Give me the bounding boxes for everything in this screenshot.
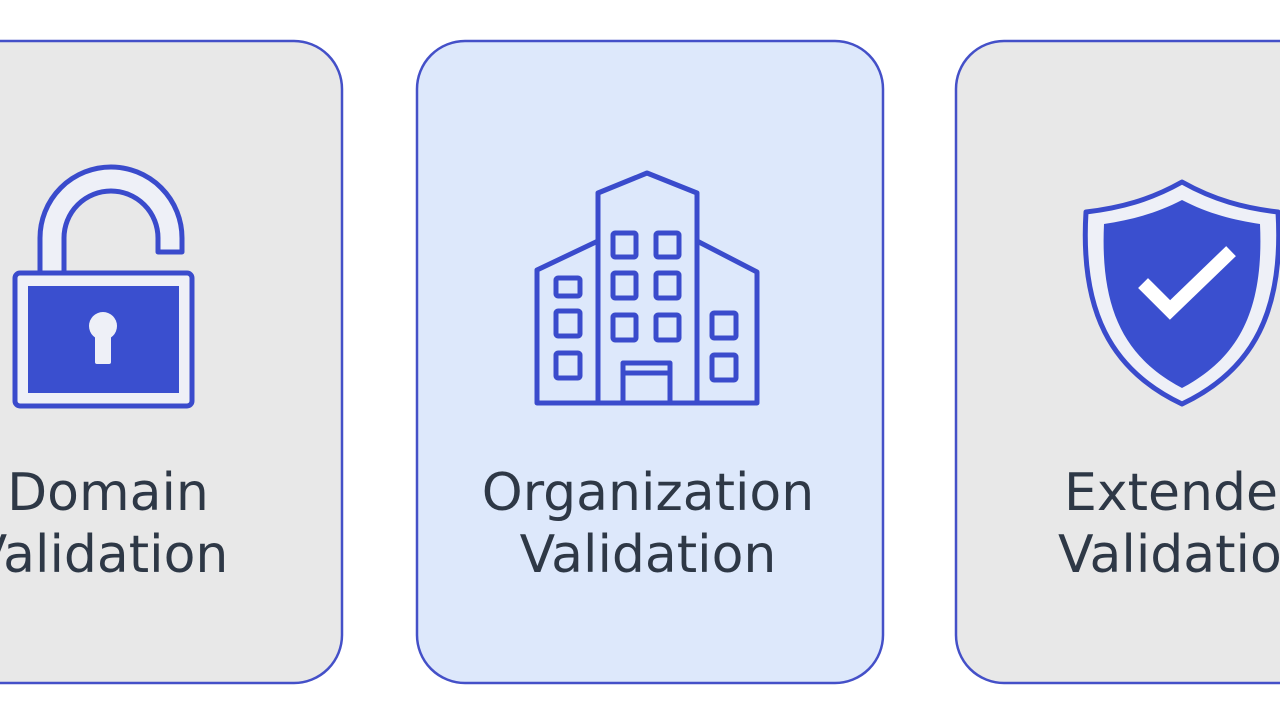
- icon: shield with check: [1085, 182, 1279, 404]
- icon: office building: [537, 173, 757, 403]
- panel: domain validation: [0, 41, 342, 683]
- panel: extended validation: [956, 41, 1280, 683]
- label: Organization Validation: Validation: [520, 525, 776, 585]
- label: Organization Validation: Organization: [482, 463, 814, 523]
- label: Domain Validation: Domain: [7, 463, 209, 523]
- label: Domain Validation: [0, 463, 228, 585]
- panel: organization validation: [417, 41, 883, 683]
- label: Organization Validation: [482, 463, 814, 585]
- label: Extended Validation: [1058, 463, 1280, 585]
- icon: open padlock: [15, 167, 192, 406]
